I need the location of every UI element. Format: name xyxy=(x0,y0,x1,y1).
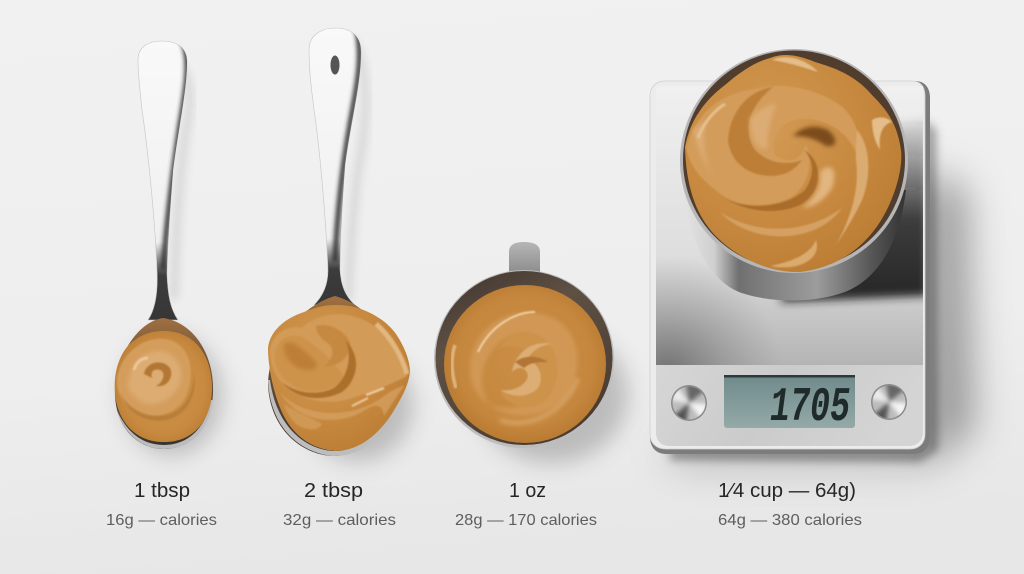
spoon: 1 tbsp xyxy=(115,41,222,455)
label: 1 oz: 1 oz xyxy=(509,480,546,502)
label: 1/4 cup: 1⁄4 cup — 64g) xyxy=(718,480,856,502)
steel bowl wall xyxy=(683,190,906,301)
lower arc xyxy=(720,208,842,236)
spoon: 2 tbsp xyxy=(268,28,413,461)
centre crevice xyxy=(793,127,835,146)
measuring cup: 1 oz xyxy=(434,242,628,463)
brushed steel platform xyxy=(656,86,923,365)
bowl of spoon xyxy=(268,296,394,456)
bowl of spoon xyxy=(115,318,213,449)
hanging hole xyxy=(330,56,340,74)
cup handle xyxy=(509,242,540,272)
peanut butter: 1 oz xyxy=(444,285,606,443)
knob left xyxy=(671,385,707,421)
scale body xyxy=(650,81,930,454)
dark bulge xyxy=(720,150,818,211)
kitchen scale with bowl xyxy=(650,49,972,462)
label: 1/4 cup xyxy=(718,480,862,529)
bowl shadow xyxy=(780,120,928,302)
right ribbon xyxy=(836,130,868,245)
LCD display: 1705 xyxy=(770,381,850,435)
peanut butter: 1 tbsp xyxy=(115,331,212,442)
control panel xyxy=(656,365,923,446)
label: 1 tbsp xyxy=(106,480,217,529)
label: 1 oz: 28g — 170 calories xyxy=(455,512,597,529)
upper left swirl xyxy=(686,86,859,205)
label: 1/4 cup: 64g — 380 calories xyxy=(718,512,862,529)
scale drop shadow xyxy=(670,170,972,462)
label: 2 tbsp: 2 tbsp xyxy=(304,480,363,502)
knob right xyxy=(871,384,907,420)
label: 1 tbsp: 16g — calories xyxy=(106,512,217,529)
label: 2 tbsp: 32g — calories xyxy=(283,512,396,529)
LCD display xyxy=(724,375,855,435)
label: 1 oz xyxy=(455,480,597,529)
peanut butter: 2 tbsp xyxy=(268,305,410,451)
label: 1 tbsp: 1 tbsp xyxy=(134,480,190,502)
bowl rim xyxy=(680,49,908,273)
label: 2 tbsp xyxy=(283,480,396,529)
peanut butter: 1/4 cup xyxy=(685,55,901,272)
cup body xyxy=(434,270,614,448)
